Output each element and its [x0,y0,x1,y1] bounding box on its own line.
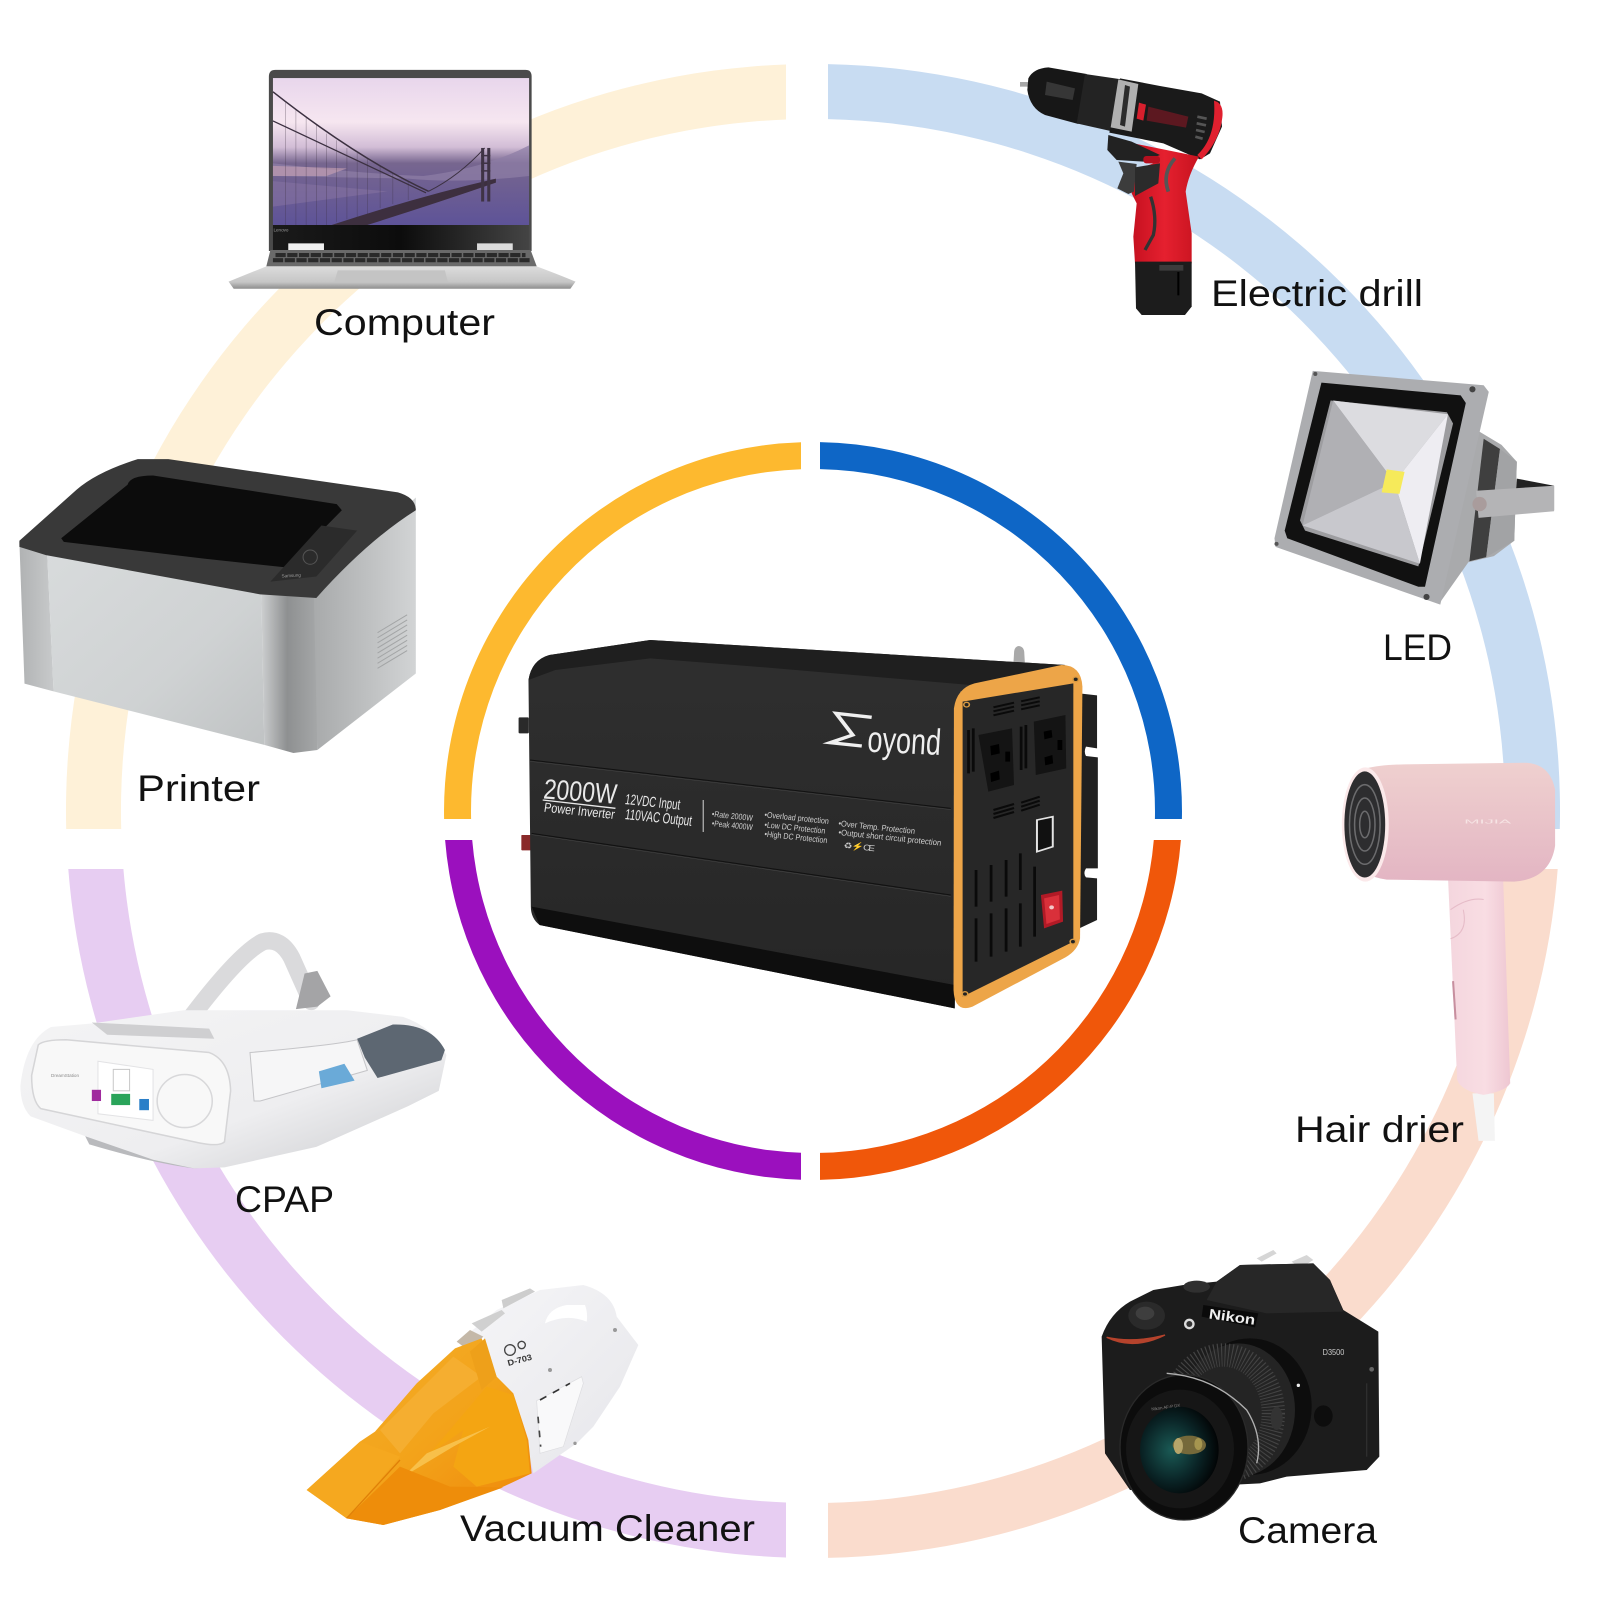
icon: handheld vacuum cleaner: D-703 [506,1352,533,1368]
icon: laptop [229,70,576,289]
inner arc: blue [820,442,1182,819]
icon: CPAP machine: DreamStation [51,1073,79,1078]
inner arc: purple [445,840,801,1180]
icon: electric drill [1020,67,1223,315]
inverter front face [954,665,1082,1008]
outer arc: yellow [66,64,786,829]
icon: handheld vacuum cleaner [307,1285,638,1525]
brand logo: oyond [866,719,942,763]
icon: CPAP machine [20,941,446,1168]
vents [969,697,1040,962]
label: Printer: Printer [137,768,260,809]
icon: hair drier: MIJIA [1464,819,1512,825]
terminals [519,646,1025,850]
label: Vacuum Cleaner: Vacuum Cleaner [460,1508,755,1549]
inverter side panel [528,640,1065,1008]
label: Electric drill: Electric drill [1211,273,1423,314]
label: Camera: Camera [1238,1510,1377,1551]
inner arc: orange [820,840,1181,1180]
spec text: •Over Temp. Protection [838,819,916,836]
spec text: •Peak 4000W [711,819,754,832]
spec text: 2000W [542,773,619,810]
outlets [978,715,1066,792]
label: Computer: Computer [314,302,495,343]
spec text: 110VAC Output [624,806,693,830]
icon: printer [19,459,416,753]
product: power inverter [519,640,1098,1008]
outer arc: blue [828,64,1560,829]
icon: DSLR camera: Nikon AF-P DX [1151,1403,1181,1412]
icon: laptop: Lenovo [273,228,289,233]
icon: DSLR camera: D3500 [1323,1347,1345,1357]
icon: DSLR camera: Nikon [1208,1305,1256,1328]
outer arc: lilac [68,869,786,1558]
spec text: •Output short circuit protection [838,828,942,847]
brand logo [830,713,942,763]
spec text: Power Inverter [543,801,616,823]
inner ring [444,442,1182,1180]
power switch [1041,891,1063,928]
spec text: •Low DC Protection [764,820,826,835]
label: LED: LED [1383,627,1452,668]
icon: DSLR camera [1102,1250,1379,1520]
icon: hair drier [1342,763,1555,1141]
label: CPAP: CPAP [235,1179,334,1220]
network port [1037,817,1053,852]
label: Hair drier: Hair drier [1295,1109,1464,1150]
icon: LED flood light [1274,371,1554,605]
icon: printer: Samsung [281,573,301,579]
spec text: •High DC Protection [764,829,828,845]
spec text: ♻ ⚡ CE [843,840,876,854]
inner arc: amber [444,442,801,819]
spec text: •Overload protection [764,810,830,826]
outer arc: peach [828,869,1558,1558]
spec text [542,773,942,854]
mounting bracket [1079,693,1098,928]
spec text: 12VDC Input [624,791,682,813]
spec text: •Rate 2000W [711,809,754,823]
